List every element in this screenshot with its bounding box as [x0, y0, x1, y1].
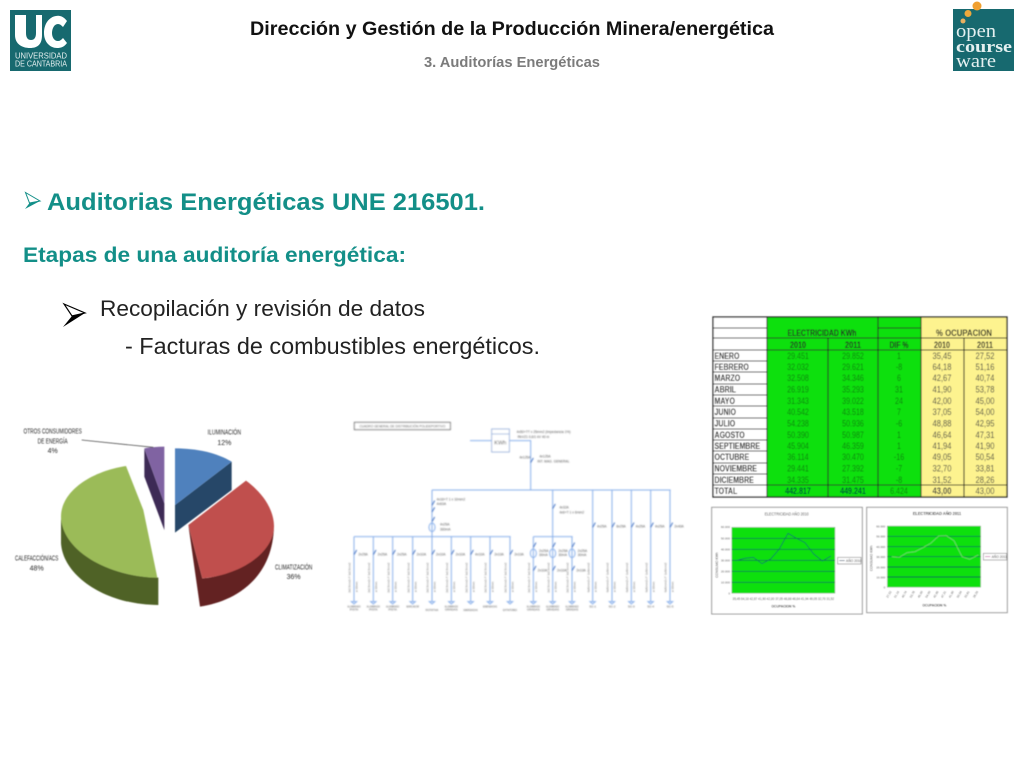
diagram labels: 2x10A	[538, 568, 548, 572]
table headers: 2010	[790, 340, 806, 350]
difference values: -7	[896, 462, 902, 474]
vertical cable labels: ø 32mm	[355, 581, 359, 592]
difference values	[890, 350, 908, 496]
diagram labels: 4x63A	[437, 502, 447, 506]
diagram labels: 4x25A	[440, 523, 450, 527]
occupancy 2011 values: 47,31	[975, 429, 995, 440]
occupancy 2010 values	[932, 350, 952, 496]
electricity 2011 values: 34.346	[842, 372, 864, 383]
diagram labels: 30mA	[578, 553, 587, 557]
diagram labels: 4x25A	[636, 525, 646, 529]
electricity 2010 values: 45.904	[787, 440, 809, 451]
pie labels: 36%	[287, 574, 301, 581]
difference values: 1	[897, 429, 901, 440]
vertical cable labels: 2x2,5mm2+T 1x2,5mm2	[406, 562, 410, 593]
diagram labels: 2x10A	[514, 552, 525, 556]
difference values: 24	[895, 395, 903, 406]
diagram labels: 4x25A	[655, 525, 665, 529]
occupancy 2011 values: 40,74	[975, 372, 995, 383]
month column: TOTAL	[714, 486, 737, 496]
electricity 2011 values	[840, 350, 866, 496]
vertical cable labels: 2x2,5mm2+T 1x2,5mm2	[504, 562, 508, 593]
vertical cable labels: ø 32mm	[471, 581, 475, 592]
line chart: electricidad 2011: 53,78	[909, 590, 916, 599]
month column: MARZO	[714, 373, 740, 383]
bottom circuit labels: PISTA	[350, 608, 358, 612]
electricity 2011 values: 31.475	[842, 474, 864, 485]
diagram labels: 2x25A	[539, 549, 549, 553]
line chart: electricidad 2010	[712, 507, 862, 614]
line chart: electricidad 2011: 27,52	[885, 590, 893, 599]
table headers: DIF %	[890, 340, 908, 350]
line chart: electricidad 2011: 42,95	[932, 590, 940, 599]
month column: ABRIL	[714, 385, 736, 395]
occupancy 2010 values: 42,00	[932, 395, 952, 406]
vertical cable labels: ø 32mm	[593, 581, 597, 592]
list sub-item: - Facturas de combustibles energéticos.	[125, 333, 540, 359]
electricity 2011 values: 46.359	[842, 440, 864, 451]
line chart: electricidad 2011: AÑO 2011	[992, 554, 1007, 559]
diagram labels: 4x125A	[539, 454, 551, 458]
bottom circuit labels: SC-2	[609, 605, 616, 609]
electricity 2011 values: 39.022	[842, 395, 864, 406]
vertical cable labels: ø 32mm	[511, 581, 515, 592]
month column: AGOSTO	[714, 430, 745, 440]
occupancy 2010 values: 48,88	[932, 418, 952, 429]
line chart: electricidad 2011: 50,54	[956, 590, 963, 599]
vertical cable labels: 2x2,5mm2+T 1x2,5mm2	[484, 562, 488, 593]
month column: ENERO	[714, 351, 739, 361]
electrical single-line diagram	[347, 422, 685, 612]
bottom circuit labels: ALUMBRADO	[445, 604, 458, 608]
bottom circuit labels: ALUMBRADO	[527, 604, 540, 608]
vertical cable labels: ø 32mm	[393, 581, 397, 592]
logo: open course ware: open	[956, 21, 997, 42]
bottom circuit labels: EXTINTORES	[503, 608, 517, 612]
difference values: 7	[897, 406, 901, 417]
diagram labels: 2x25A	[578, 549, 588, 553]
diagram labels: 4x50+TT x 25mm2 (Impedancia 1%)	[517, 430, 571, 434]
month column: JUNIO	[714, 407, 736, 417]
logo: Universidad de Cantabria	[10, 10, 71, 71]
bottom circuit labels: ALUMBRADO	[367, 604, 380, 608]
occupancy 2011 values: 53,78	[975, 384, 995, 395]
vertical cable labels: 2x2,5mm2+T 1x2,5mm2	[348, 562, 352, 593]
occupancy 2010 values: 31,52	[932, 474, 952, 485]
line chart: electricidad 2011: 60.000	[876, 524, 886, 528]
logo: Universidad de Cantabria: DE CANTABRIA	[15, 60, 68, 68]
occupancy 2011 values: 42,95	[975, 418, 995, 429]
table fills	[713, 317, 1007, 497]
bottom circuit labels: SC-5	[667, 605, 674, 609]
electricity 2010 values: 442.817	[785, 485, 811, 496]
pie labels: OTROS CONSUMIDORES	[23, 428, 82, 435]
bottom circuit labels: EMERGENCIAS	[464, 608, 478, 612]
diagram labels: 2x10A	[436, 552, 446, 556]
diagram labels: 2x25A	[358, 552, 369, 556]
vertical cable labels: 2x2,5mm2+T 1x2,5mm2	[546, 562, 550, 593]
logo: open course ware	[953, 2, 1014, 72]
table headers: % OCUPACION	[936, 328, 992, 338]
line chart: electricidad 2010: 40.000	[721, 548, 730, 552]
diagram labels: 300mA	[440, 527, 451, 531]
slice: calefacción	[61, 466, 158, 605]
diagram labels: 2x25A	[397, 552, 407, 556]
diagram labels	[358, 430, 685, 572]
difference values: 6.424	[890, 485, 908, 496]
bus lines	[351, 441, 673, 604]
vertical cable labels: ø 32mm	[433, 581, 437, 592]
logo: Universidad de Cantabria: UNIVERSIDAD	[15, 52, 67, 60]
leader line	[82, 440, 153, 447]
bottom circuit labels: MARCADOR	[406, 604, 420, 608]
occupancy 2010 values: 41,90	[932, 384, 952, 395]
vertical cable labels: 2x2,5mm2+T 1x2,5mm2	[445, 562, 449, 593]
occupancy 2010 values: 32,70	[932, 463, 952, 474]
diagram labels: 2x10A	[557, 568, 567, 572]
vertical cable labels: 2x2,5mm2+T 1x2,5mm2	[566, 562, 570, 593]
line chart: electricidad 2011: 30.000	[876, 555, 886, 559]
electricity 2011 values: 449.241	[840, 485, 866, 496]
month column: SEPTIEMBRE	[714, 441, 761, 451]
table headers: 2010	[934, 340, 950, 350]
electricity 2010 values: 32.508	[787, 372, 809, 383]
pie labels: ILUMINACIÓN	[208, 428, 241, 437]
occupancy 2011 values: 45,00	[975, 395, 995, 406]
bottom circuit labels: ALUMBRADO	[546, 604, 560, 608]
pie labels: 48%	[30, 566, 44, 573]
difference values: 1	[897, 440, 901, 451]
pie chart: energy consumers	[15, 428, 312, 607]
table headers: 2011	[977, 340, 993, 350]
electricity 2010 values: 54.238	[787, 417, 809, 429]
icon: list arrow bullet	[63, 304, 85, 327]
diagram labels: 2x10A	[494, 552, 505, 556]
vertical cable labels: ø 32mm	[632, 581, 636, 592]
meter: KWh	[494, 441, 506, 447]
bottom circuit labels: GRADAS	[566, 608, 578, 612]
difference values: 6	[897, 372, 901, 383]
electricity 2011 values: 30.470	[842, 451, 864, 462]
occupancy 2011 values	[975, 350, 995, 496]
diagram labels: 2x10A	[576, 568, 587, 572]
table headers	[788, 328, 993, 350]
electricity 2010 values: 40.542	[787, 406, 809, 417]
icon: heading arrow bullet	[25, 192, 40, 209]
line chart: electricidad 2010: 30.000	[721, 559, 730, 563]
vertical cable labels: ø 32mm	[491, 581, 495, 592]
occupancy 2010 values: 64,18	[932, 361, 952, 372]
occupancy 2011 values: 50,54	[975, 451, 995, 462]
difference values: -8	[896, 474, 902, 485]
difference values: -8	[896, 361, 902, 372]
line chart: electricidad 2010: ELECTRICIDAD AÑO 2010	[765, 512, 809, 517]
electricity 2010 values: 31.343	[787, 395, 809, 406]
line chart: electricidad 2010: 20.000	[721, 570, 730, 574]
logo: open course ware: course	[956, 37, 1013, 56]
line chart: electricidad 2010: 35,45 64,18 42,67 41,90 42,00 37,05 48,88 46,64 41,94 49,05 32,70 31,52	[732, 597, 834, 601]
logo: open course ware: ware	[956, 51, 996, 72]
diagram labels: 4x6+T 1 x 6mm2	[559, 510, 584, 514]
line chart: electricidad 2011: ELECTRICIDAD AÑO 2011	[913, 511, 962, 516]
switches	[354, 458, 673, 571]
vertical cable labels: ø 32mm	[573, 581, 577, 592]
vertical cable labels: 2x2,5mm2+T 1x2,5mm2	[426, 562, 430, 593]
bottom circuit labels: EMERGENCIAS	[483, 604, 497, 608]
slice: iluminación	[175, 448, 232, 533]
occupancy 2010 values: 42,67	[932, 372, 952, 383]
slice: otros	[144, 447, 164, 530]
occupancy 2011 values: 28,26	[975, 474, 995, 485]
occupancy 2010 values: 37,05	[932, 406, 952, 417]
vertical cable labels: 2x2,5mm2+T 1x2,5mm2	[367, 562, 371, 593]
vertical cable labels: 4x6mm2+T 1x6mm2	[586, 562, 590, 593]
electricity 2010 values	[785, 350, 811, 496]
bottom circuit labels: ROTATIVA	[426, 608, 438, 612]
occupancy 2011 values: 43,00	[975, 485, 995, 496]
heading: Auditorias Energéticas UNE 216501.	[47, 189, 485, 216]
diagram labels: 30mA	[558, 553, 568, 557]
electricity 2010 values: 29.441	[787, 462, 809, 474]
month column: OCTUBRE	[714, 452, 750, 462]
bottom circuit labels: ALUMBRADO	[386, 604, 400, 608]
line chart: electricidad 2011: 28,26	[972, 590, 979, 599]
list item: Recopilación y revisión de datos	[100, 296, 425, 321]
month column: DICIEMBRE	[714, 475, 754, 485]
line chart: electricidad 2011: 50.000	[876, 535, 886, 539]
bottom circuit labels: PISTA	[388, 608, 397, 612]
vertical cable labels: 2x2,5mm2+T 1x2,5mm2	[527, 562, 531, 593]
diagram labels: 2x10A	[417, 552, 427, 556]
occupancy 2011 values: 27,52	[975, 350, 995, 361]
line chart: electricidad 2011	[867, 507, 1007, 613]
vertical cable labels: ø 32mm	[452, 581, 456, 592]
line chart: electricidad 2011: 0	[884, 585, 886, 589]
bottom circuit labels: GRADAS	[445, 608, 458, 612]
line chart: electricidad 2010: 50.000	[721, 537, 730, 541]
diagram labels: 4x125A	[519, 456, 531, 460]
vertical cable labels: ø 32mm	[553, 581, 557, 592]
pie labels: CLIMATIZACIÓN	[275, 562, 312, 571]
month column: JULIO	[714, 419, 735, 429]
electricity 2011 values: 50.936	[842, 417, 864, 429]
line chart: electricidad 2011: 45,00	[917, 590, 924, 599]
electricity 2011 values: 43.518	[842, 406, 864, 417]
bottom circuit labels: GRADAS	[546, 608, 559, 612]
table grid	[713, 317, 1007, 497]
bottom circuit labels: ALUMBRADO	[347, 604, 361, 608]
line chart: electricidad 2011: CONSUMO KWh	[869, 545, 873, 571]
data table: electricity and occupancy	[713, 317, 1007, 497]
line chart: electricidad 2010: 10.000	[721, 581, 730, 585]
line chart: electricidad 2011: 51,16	[893, 590, 900, 599]
line chart: electricidad 2011: 54,00	[924, 590, 932, 599]
difference values: 31	[895, 383, 903, 395]
diagram labels: 30mA	[539, 553, 548, 557]
vertical cable labels	[348, 562, 675, 593]
diagram labels: RkVZ1 0,6/1 kV 40 m	[518, 435, 550, 439]
line chart: electricidad 2010: 60.000	[721, 525, 730, 529]
electricity 2011 values: 35.293	[842, 383, 864, 395]
difference values: 1	[897, 350, 901, 361]
line chart: electricidad 2011: 47,31	[940, 590, 947, 599]
occupancy 2011 values: 54,00	[975, 406, 995, 417]
month column	[714, 351, 761, 496]
pie labels: 12%	[217, 440, 231, 447]
line chart: electricidad 2010: AÑO 2010	[846, 558, 862, 563]
difference values: -6	[896, 417, 902, 429]
occupancy 2011 values: 51,16	[975, 361, 995, 372]
vertical cable labels: 2x2,5mm2+T 1x2,5mm2	[386, 562, 390, 593]
electricity 2011 values: 29.852	[842, 350, 864, 361]
pie labels	[15, 428, 312, 581]
bottom circuit labels: SC-1	[589, 605, 596, 609]
electricity 2011 values: 27.392	[842, 462, 864, 474]
line chart: electricidad 2011: 40.000	[876, 545, 886, 549]
diagram labels: 4x10A	[475, 552, 485, 556]
vertical cable labels: 4x6mm2+T 1x6mm2	[664, 562, 668, 593]
pie labels: 4%	[48, 448, 58, 455]
electricity 2010 values: 34.335	[787, 474, 809, 485]
pie labels: DE ENERGÍA	[38, 436, 68, 445]
diagram labels: INT. MAG. GENERAL	[537, 460, 570, 464]
line chart: electricidad 2011: 41,90	[948, 590, 955, 599]
occupancy 2011 values: 41,90	[975, 440, 995, 451]
bottom circuit labels: SC-3	[628, 605, 635, 609]
month column: NOVIEMBRE	[714, 464, 758, 474]
electricity 2010 values: 36.114	[787, 451, 809, 462]
table headers: 2011	[845, 340, 861, 350]
diagram labels: 4x16+T 1 x 10mm2	[437, 497, 465, 501]
subtitle: 3. Auditorías Energéticas	[424, 55, 600, 71]
bottom circuit labels: PISTA	[369, 608, 378, 612]
subheading: Etapas de una auditoría energética:	[23, 243, 406, 267]
vertical cable labels: 4x6mm2+T 1x6mm2	[644, 562, 648, 593]
vertical cable labels: ø 32mm	[651, 581, 655, 592]
occupancy 2010 values: 41,94	[932, 440, 952, 451]
line chart: electricidad 2011: 10.000	[876, 575, 886, 579]
vertical cable labels: ø 32mm	[534, 581, 538, 592]
occupancy 2010 values: 35,45	[932, 350, 952, 361]
line chart: electricidad 2010: 0	[728, 592, 730, 596]
occupancy 2010 values: 46,64	[932, 429, 952, 440]
electricity 2010 values: 29.451	[787, 350, 809, 361]
diagram labels: 2x10A	[456, 552, 466, 556]
table headers: ELECTRICIDAD KWh	[788, 328, 856, 338]
vertical cable labels: 4x6mm2+T 1x6mm2	[606, 562, 610, 593]
vertical cable labels: ø 32mm	[413, 581, 417, 592]
vertical cable labels: ø 32mm	[374, 581, 378, 592]
line chart: electricidad 2011: 40,74	[901, 590, 908, 599]
diagram labels: 2x25A	[378, 552, 388, 556]
occupancy 2010 values: 43,00	[932, 485, 952, 496]
diagram labels: 4x25A	[597, 525, 607, 529]
diagram labels: 6x25A	[616, 525, 627, 529]
occupancy 2010 values: 49,05	[932, 451, 952, 462]
bottom circuit labels	[347, 604, 674, 612]
month column: FEBRERO	[714, 362, 749, 372]
line chart: electricidad 2010: CONSUMO KWh	[715, 552, 719, 578]
pie labels: CALEFACCIÓN/ACS	[15, 554, 59, 563]
difference values: -16	[894, 451, 904, 462]
bottom circuit labels: GRADAS	[527, 608, 540, 612]
electricity 2011 values: 29.621	[842, 361, 864, 372]
title: Dirección y Gestión de la Producción Minera/energética	[250, 18, 774, 40]
bottom circuit labels: ALUMBRADO	[565, 604, 579, 608]
line chart: electricidad 2011: OCUPACION %	[922, 604, 946, 608]
electricity 2010 values: 32.032	[787, 361, 809, 372]
diagram labels: 2x25A	[558, 549, 569, 553]
occupancy 2011 values: 33,81	[975, 463, 995, 474]
line chart: electricidad 2010: OCUPACION %	[771, 605, 795, 609]
month column: MAYO	[714, 396, 735, 406]
line chart: electricidad 2011: 20.000	[876, 565, 886, 569]
vertical cable labels: 4x6mm2+T 1x6mm2	[625, 562, 629, 593]
vertical cable labels: 2x2,5mm2+T 1x2,5mm2	[464, 562, 468, 593]
diagram title box	[354, 422, 450, 430]
diagram labels: 4x32A	[559, 506, 570, 510]
electricity 2010 values: 26.919	[787, 383, 809, 395]
vertical cable labels: ø 32mm	[613, 581, 617, 592]
meter	[492, 429, 509, 452]
electricity 2010 values: 50.390	[787, 429, 809, 440]
slice: climatización	[188, 481, 274, 607]
diagram title box: CUADRO GENERAL DE DISTRIBUCIÓN POLIDEPORTIVO	[359, 423, 445, 428]
vertical cable labels: ø 32mm	[671, 581, 675, 592]
electricity 2011 values: 50.987	[842, 429, 864, 440]
bottom circuit labels: SC-4	[647, 605, 654, 609]
line chart: electricidad 2011: 33,81	[963, 590, 971, 599]
diagram labels: 2x40A	[674, 525, 685, 529]
